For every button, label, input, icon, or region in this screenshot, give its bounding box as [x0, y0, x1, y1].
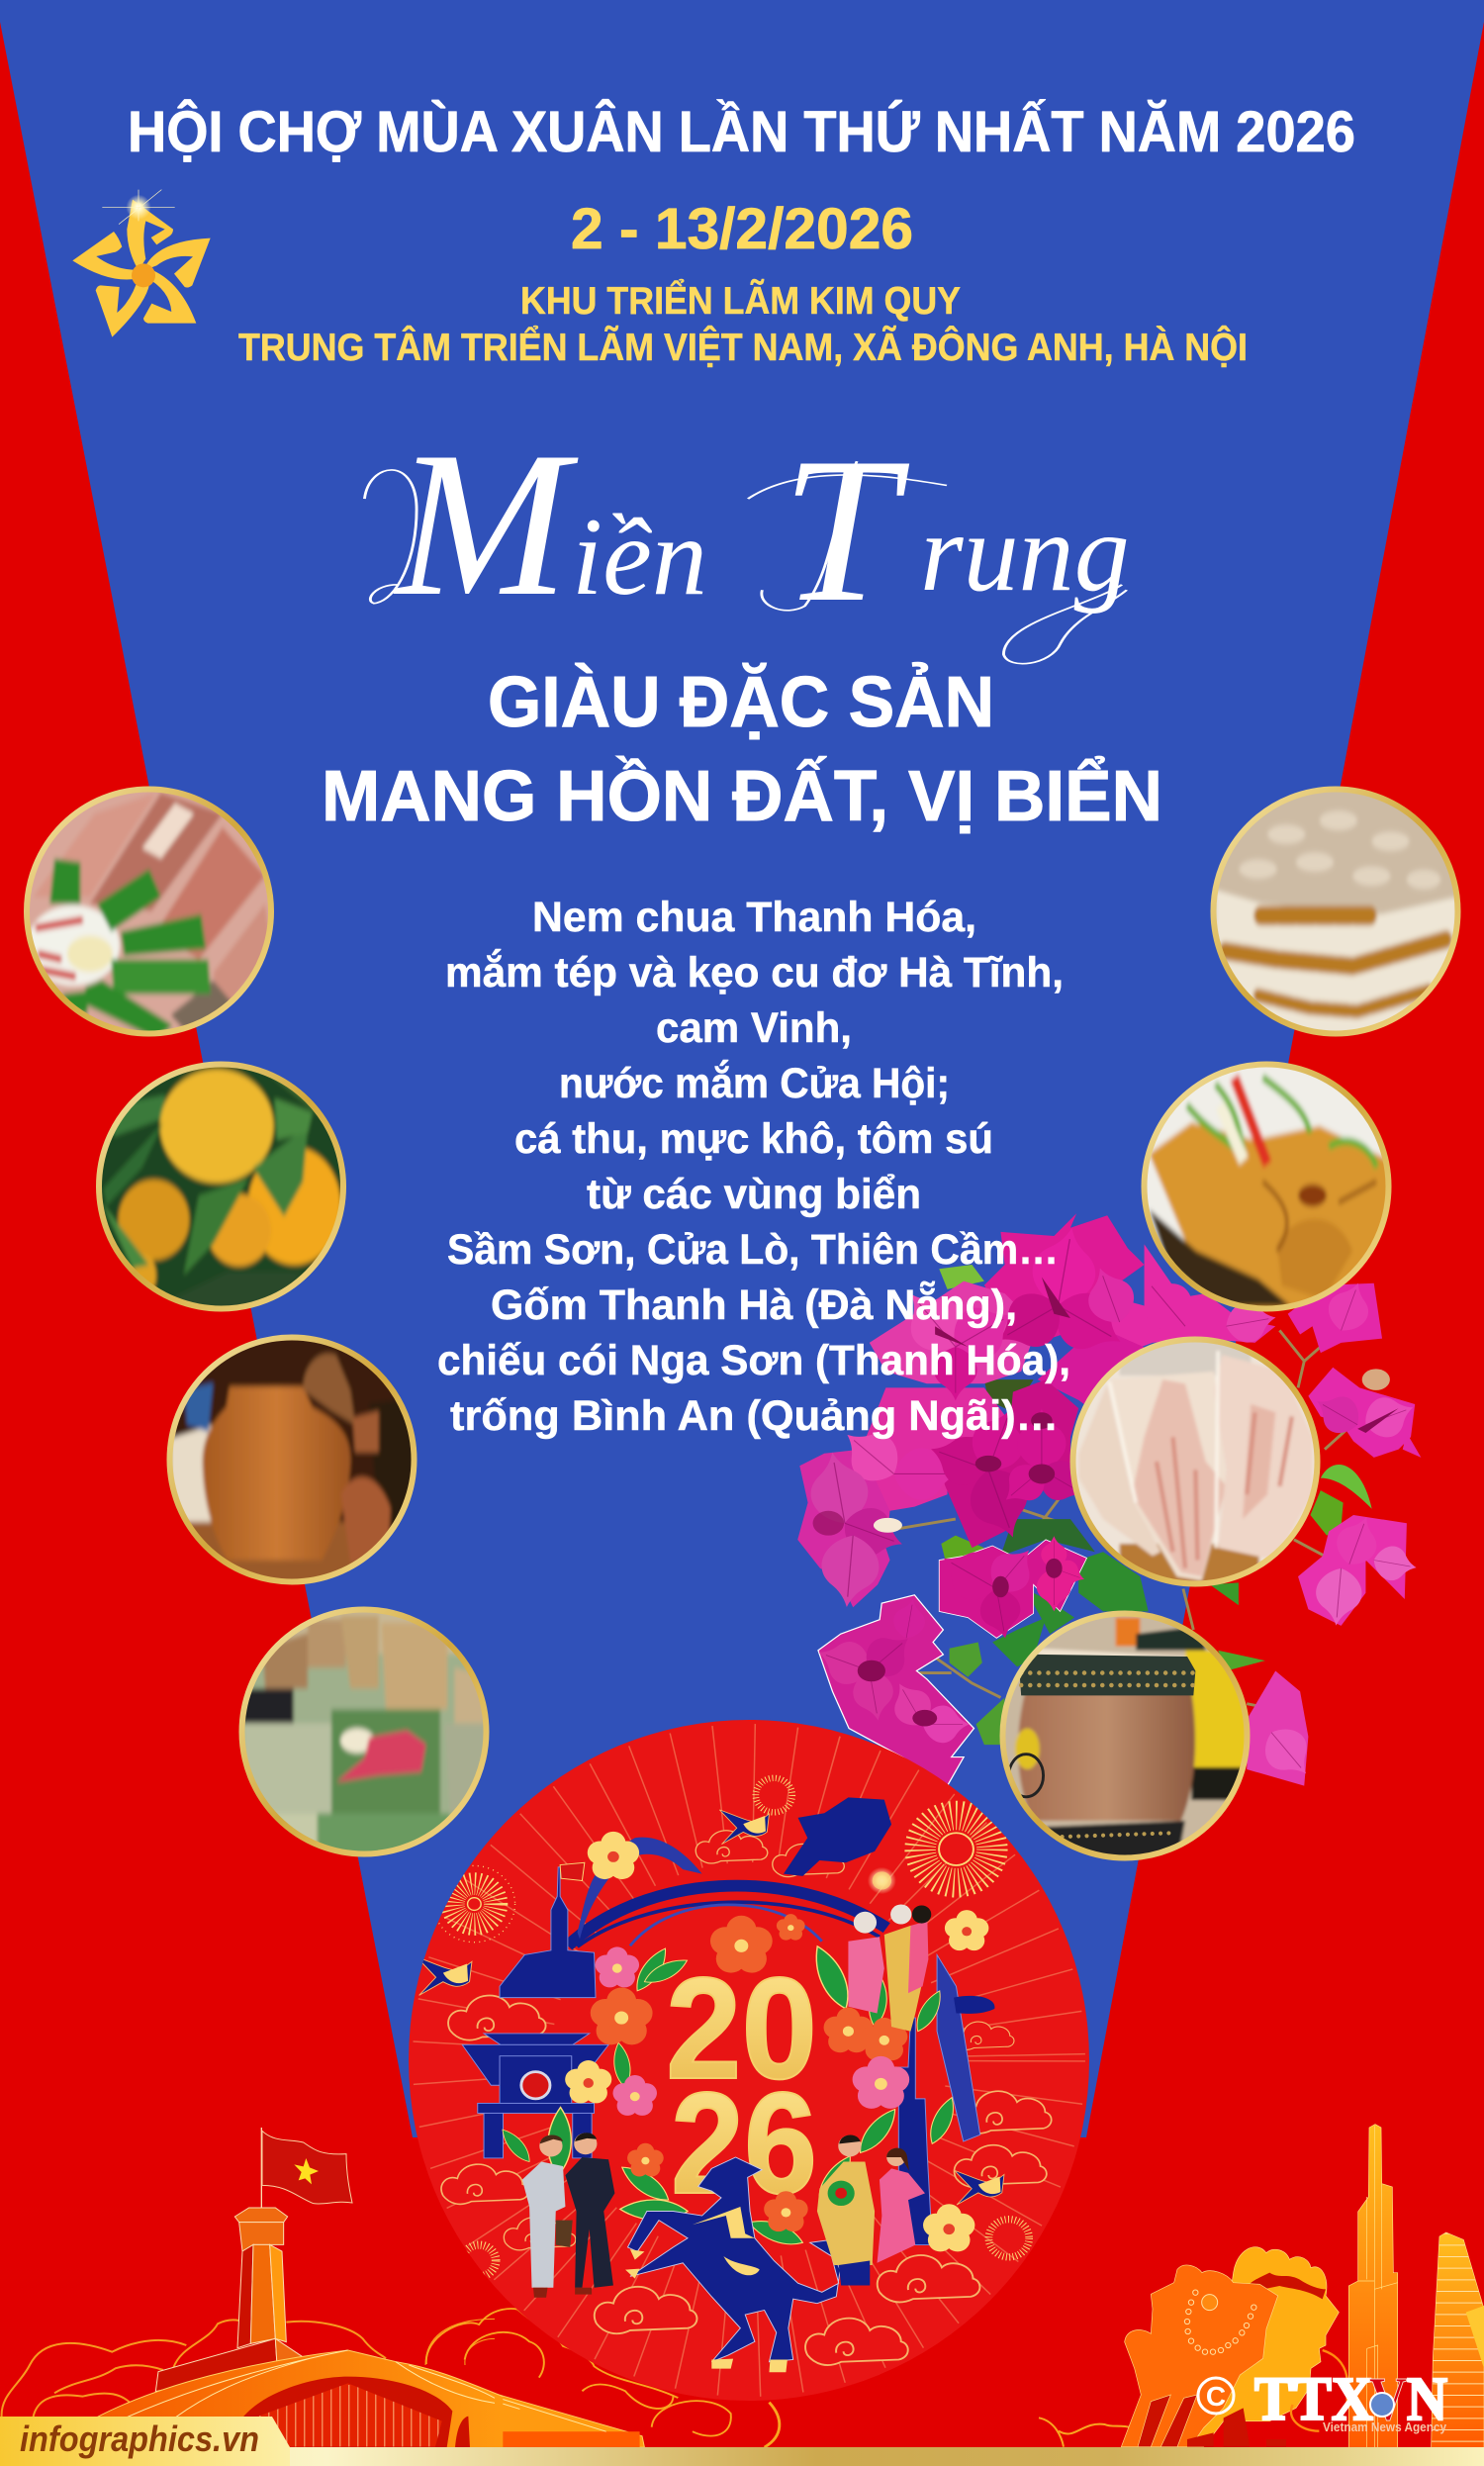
bridge arch	[568, 1886, 886, 1946]
Vietnam flag	[262, 2131, 352, 2204]
emblem illustration	[417, 1778, 1052, 2372]
flag pole	[259, 2128, 263, 2209]
clouds	[441, 1831, 1052, 2365]
flag tower	[500, 1867, 596, 1998]
body text: Nem chua Thanh Hóa,	[532, 894, 976, 941]
2026 round emblem	[409, 1720, 1089, 2401]
photo: oranges	[96, 1061, 346, 1312]
leaves	[939, 1265, 1372, 1745]
photo: pottery jar	[166, 1334, 417, 1585]
Da Nang tower	[1432, 2232, 1484, 2447]
fireworks	[433, 1778, 1029, 2276]
body text: chiếu cói Nga Sơn (Thanh Hóa),	[437, 1337, 1070, 1384]
event title: HỘI CHỢ MÙA XUÂN LẦN THỨ NHẤT NĂM 2026	[128, 100, 1355, 164]
infographics.vn tab: infographics.vn	[20, 2419, 259, 2459]
logo: golden five-petal star	[72, 190, 211, 337]
businessmen	[522, 2133, 614, 2298]
swallows	[417, 1810, 1004, 2205]
year numerals	[666, 1947, 817, 2224]
body text: nước mắm Cửa Hội;	[559, 1059, 950, 1107]
flag star	[294, 2158, 319, 2184]
dragon head	[1121, 2265, 1278, 2447]
layered heart petals	[804, 1222, 1420, 1787]
family	[848, 1905, 931, 2032]
small clouds and low blocks	[1039, 2418, 1131, 2447]
TTXVN logo: TTX	[1254, 2366, 1373, 2433]
body text: mắm tép và kẹo cu đơ Hà Tĩnh,	[445, 948, 1064, 996]
TTXVN logo: N	[1407, 2366, 1447, 2433]
radiating rays	[482, 1793, 1016, 2327]
stems	[881, 1330, 1345, 1708]
main heading: GIÀU ĐẶC SẢN	[488, 662, 994, 742]
header	[128, 100, 1355, 369]
front clouds	[426, 2309, 780, 2447]
year numerals: 20	[666, 1947, 817, 2109]
body text: từ các vùng biển	[587, 1171, 921, 1218]
photo: peanut rice crackers	[1206, 779, 1471, 1050]
script heading with swashes: rung	[920, 492, 1130, 615]
horse	[625, 2157, 840, 2372]
body text: cá thu, mực khô, tôm sú	[514, 1115, 993, 1163]
main heading: MANG HỒN ĐẤT, VỊ BIỂN	[322, 756, 1162, 836]
tower	[155, 2208, 305, 2392]
temple gate	[462, 2034, 608, 2158]
skyscrapers	[937, 1954, 980, 2141]
dragon	[578, 1838, 702, 1940]
base petals	[797, 1213, 1421, 1786]
main heading	[322, 662, 1162, 836]
photo: nem chua	[24, 786, 274, 1037]
photo: dried squid	[1067, 1335, 1325, 1593]
event date: 2 - 13/2/2026	[571, 197, 913, 261]
body text: Sầm Sơn, Cửa Lò, Thiên Cầm…	[447, 1226, 1059, 1274]
scene: dragon and skyline	[1039, 2125, 1484, 2447]
hall roof	[96, 2350, 503, 2447]
TTXVN logo: V	[1369, 2366, 1407, 2433]
flower centres	[813, 1277, 1399, 1726]
year numerals: 26	[671, 2062, 817, 2224]
photo: sedge mats	[239, 1607, 489, 1856]
dragon mane	[1177, 2247, 1339, 2447]
TTXVN logo: Vietnam News Agency	[1323, 2419, 1447, 2434]
photo: braised fish	[1135, 1057, 1400, 1320]
TTXVN logo	[1254, 2366, 1447, 2434]
wreath flowers	[565, 1832, 988, 2251]
copyright mark	[1198, 2378, 1234, 2414]
dragon hair strip	[1237, 2273, 1326, 2306]
copyright mark: C	[1206, 2381, 1226, 2412]
body text: Gốm Thanh Hà (Đà Nẵng),	[491, 1280, 1017, 1329]
script heading with swashes: T	[782, 416, 910, 645]
wreath leaves	[496, 1943, 958, 2248]
body text: cam Vinh,	[656, 1004, 852, 1052]
food photos: right column	[996, 779, 1471, 1868]
bottom gold band	[0, 2447, 1484, 2466]
hall right wing	[347, 2355, 644, 2447]
bougainvillea flowers	[797, 1213, 1421, 1787]
venue line one: KHU TRIỂN LÃM KIM QUY	[520, 278, 961, 323]
script heading with swashes	[364, 410, 1130, 664]
body text	[437, 894, 1070, 1440]
couple in ao dai	[817, 2134, 925, 2285]
hall arch	[242, 2377, 452, 2447]
Landmark tower	[1348, 2125, 1398, 2447]
food photos: left column	[19, 779, 497, 1869]
script heading with swashes: M	[393, 410, 579, 639]
script heading with swashes: iền	[572, 496, 707, 618]
body text: trống Bình An (Quảng Ngãi)…	[450, 1392, 1059, 1440]
scene: flag tower and exhibition hall	[2, 2128, 780, 2447]
back clouds left	[2, 2320, 386, 2418]
venue line two: TRUNG TÂM TRIỂN LÃM VIỆT NAM, XÃ ĐÔNG ANH, HÀ NỘI	[238, 325, 1248, 369]
photo: Binh An drum	[996, 1609, 1254, 1868]
